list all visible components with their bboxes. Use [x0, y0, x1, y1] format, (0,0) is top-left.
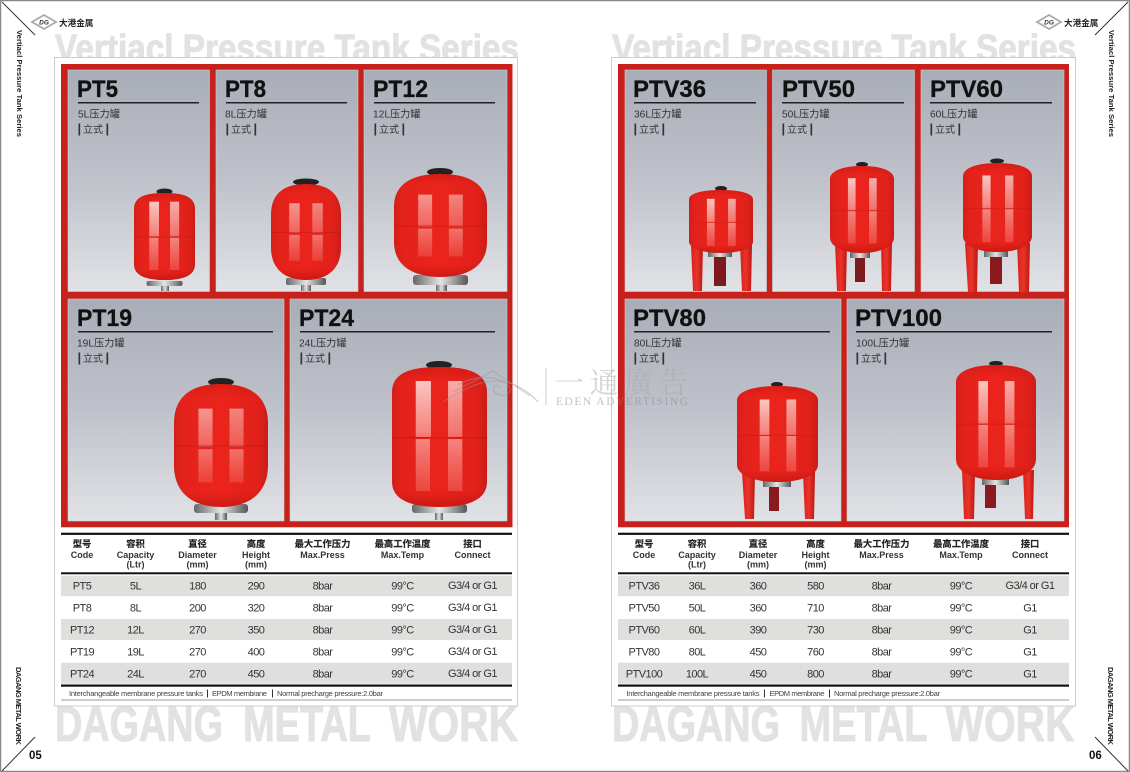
panel: PTV80: 立式: [639, 352, 659, 365]
panel: PT19: |: [106, 350, 109, 365]
row PTV80: 8bar: [872, 646, 892, 658]
panel: PT24: [290, 299, 507, 521]
row PTV80: PTV80: [629, 646, 660, 658]
panel: PT5: [68, 70, 210, 292]
watermark Chinese text: 一通廣告: [555, 361, 688, 402]
panel: PT5: |: [106, 121, 109, 136]
table header right: 直径: [749, 538, 767, 549]
footnote left: EPDM membrane: [212, 689, 267, 698]
side label top right: Vertiacl Pressure Tank Series: [1107, 30, 1116, 137]
row PTV36: 360: [750, 580, 767, 592]
table header left: Max.Press: [300, 550, 345, 560]
PT19 tank: [174, 378, 268, 520]
row PT5: G3/4 or G1: [448, 580, 497, 592]
row PT5: 8bar: [313, 580, 333, 592]
watermark title right: Vertiacl Pressure Tank Series: [612, 28, 1076, 70]
panel: PT19: [68, 299, 284, 521]
watermark footer left: WORK: [389, 696, 518, 752]
red frame left: [61, 64, 512, 527]
row PT19: 400: [248, 646, 265, 658]
PTV36 tank: [689, 186, 753, 291]
PTV100 tank: [956, 361, 1036, 519]
row PT24: 270: [189, 668, 206, 680]
row PTV50: 8bar: [872, 602, 892, 614]
watermark title left: Vertiacl Pressure Tank Series: [55, 28, 519, 70]
row PT5: 5L: [130, 580, 141, 592]
row PTV100: G1: [1023, 668, 1037, 680]
panel: PTV60: 60L压力罐: [930, 108, 978, 120]
panel: PT19: |: [78, 350, 81, 365]
footnote right: EPDM membrane: [770, 689, 824, 698]
red frame right: [618, 64, 1069, 527]
table header left: Connect: [454, 550, 491, 560]
PT24 heading: PT24: [299, 305, 355, 332]
PT8 tank: [271, 178, 341, 291]
row PT19: [70, 646, 497, 658]
panel: PTV60: [921, 70, 1064, 292]
logo right: [1037, 15, 1098, 29]
row PTV50: [629, 602, 1037, 614]
panel: PT24: |: [300, 350, 303, 365]
row PTV100: 450: [750, 668, 767, 680]
panel: PTV80: 80L压力罐: [634, 336, 682, 350]
panel: PTV100: 100L压力罐: [856, 336, 909, 350]
row PT12: 270: [189, 624, 206, 636]
panel: PTV60: |: [930, 121, 933, 136]
table left: [61, 533, 512, 700]
panel: PT24: 立式: [305, 352, 325, 365]
row PT8: 200: [189, 602, 206, 614]
row PTV100: 100L: [686, 668, 709, 680]
table header right: Height: [802, 550, 830, 560]
row PT19: 99°C: [391, 646, 414, 658]
PT19 heading: PT19: [77, 305, 132, 332]
row PT24: 99°C: [391, 668, 414, 680]
table header right: 容积: [688, 538, 707, 549]
PT12 heading: PT12: [373, 76, 428, 103]
row PTV100: PTV100: [626, 668, 663, 680]
row PTV80: [629, 646, 1037, 658]
panel: PTV60: |: [958, 121, 961, 136]
panel: PT8: |: [254, 121, 257, 136]
table header right: 最大工作压力: [854, 538, 909, 549]
footnote left: Interchangeable membrane pressure tanks: [69, 689, 203, 698]
panel: PT24: 24L压力罐: [299, 336, 347, 350]
table header right: (Ltr): [688, 560, 706, 570]
row PTV36: 36L: [689, 580, 706, 592]
panel: PT8: 8L压力罐: [225, 108, 267, 120]
table header left: 接口: [463, 538, 482, 549]
panel: PTV36: |: [662, 121, 665, 136]
table header left: Max.Temp: [381, 550, 425, 560]
footnote right: [626, 689, 940, 698]
panel: PTV36: 36L压力罐: [634, 108, 682, 120]
PT24 tank: [392, 361, 487, 520]
side label top left: Vertiacl Pressure Tank Series: [15, 30, 24, 137]
row PTV36: [618, 576, 1069, 596]
row PTV60: 730: [807, 624, 824, 636]
logo left: DG: [39, 20, 49, 26]
row PT12: 8bar: [313, 624, 333, 636]
row PT12: 99°C: [391, 624, 414, 636]
row PTV60: 60L: [689, 624, 706, 636]
panel: PTV36: [625, 70, 766, 292]
table header left: Capacity: [117, 550, 154, 560]
row PT19: PT19: [70, 646, 94, 658]
row PTV60: 8bar: [872, 624, 892, 636]
watermark footer right: METAL: [800, 696, 928, 752]
table header left: Height: [242, 550, 270, 560]
row PTV50: 360: [750, 602, 767, 614]
panel: PTV80: |: [634, 350, 637, 365]
row PTV36: 580: [807, 580, 824, 592]
row PTV60: 99°C: [950, 624, 973, 636]
row PTV50: 710: [807, 602, 824, 614]
panel: PTV60: 立式: [935, 123, 955, 136]
row PTV50: 50L: [689, 602, 706, 614]
footnote right: Normal precharge pressure:2.0bar: [834, 689, 940, 698]
PTV60 heading: PTV60: [930, 76, 1003, 103]
row PT12: 12L: [127, 624, 144, 636]
row PTV36: 8bar: [872, 580, 892, 592]
watermark footer right: WORK: [946, 696, 1074, 752]
table header right: (mm): [804, 560, 827, 570]
panel: PT5: |: [78, 121, 81, 136]
row PT8: [73, 602, 497, 614]
row PTV80: G1: [1023, 646, 1037, 658]
logo right: DG: [1044, 20, 1054, 26]
panel: PTV50: |: [810, 121, 813, 136]
table header right: Max.Temp: [939, 550, 983, 560]
row PTV60: PTV60: [629, 624, 660, 636]
table header left: [71, 538, 491, 570]
row PT24: 450: [248, 668, 265, 680]
row PTV100: [618, 663, 1069, 684]
page number 05: 05: [29, 750, 42, 762]
watermark English text: EDEN ADVERTISING: [556, 396, 688, 408]
table right: [618, 533, 1069, 700]
panel: PT12: 立式: [379, 123, 399, 136]
row PT5: 99°C: [391, 580, 414, 592]
row PTV60: 390: [750, 624, 767, 636]
page 06: [612, 15, 1116, 762]
watermark footer right: DAGANG: [612, 696, 780, 752]
row PT24: 8bar: [313, 668, 333, 680]
panel: PTV100: 立式: [861, 352, 881, 365]
panel: PT12: |: [402, 121, 405, 136]
footnote left: Normal precharge pressure:2.0bar: [277, 689, 383, 698]
panel: PT12: 12L压力罐: [373, 108, 421, 120]
row PTV36: G3/4 or G1: [1006, 580, 1055, 592]
table header right: Connect: [1012, 550, 1048, 560]
table header right: Diameter: [739, 550, 778, 560]
row PTV80: 80L: [689, 646, 706, 658]
row PT24: [61, 663, 512, 684]
table header left: (Ltr): [126, 560, 144, 570]
row PT8: PT8: [73, 602, 92, 614]
row PTV50: G1: [1023, 602, 1037, 614]
watermark footer left: [55, 696, 518, 752]
table header left: 最高工作温度: [375, 538, 431, 549]
row PTV60: G1: [1023, 624, 1037, 636]
table header right: 高度: [806, 538, 825, 549]
card left: [54, 58, 518, 706]
table header left: 直径: [188, 538, 207, 549]
row PTV100: 99°C: [950, 668, 973, 680]
row PT5: [61, 576, 512, 596]
row PTV36: PTV36: [629, 580, 660, 592]
watermark footer left: DAGANG: [55, 696, 223, 752]
table header left: Diameter: [178, 550, 217, 560]
row PT5: 290: [248, 580, 265, 592]
watermark icon: [443, 371, 538, 402]
panel: PT19: 19L压力罐: [77, 336, 125, 350]
table header left: 最大工作压力: [295, 538, 350, 549]
PTV50 heading: PTV50: [782, 76, 855, 103]
row PT12: G3/4 or G1: [448, 624, 497, 636]
panel: PTV80: [625, 299, 841, 521]
PTV60 tank: [963, 158, 1032, 292]
row PTV50: 99°C: [950, 602, 973, 614]
panel: PTV50: 立式: [787, 123, 807, 136]
row PTV36: 99°C: [950, 580, 973, 592]
panel: PTV50: |: [782, 121, 785, 136]
panel: PT12: [364, 70, 507, 292]
row PT8: 8bar: [313, 602, 333, 614]
panel: PTV80: |: [662, 350, 665, 365]
table header right: Capacity: [678, 550, 716, 560]
panel: PT12: |: [374, 121, 377, 136]
table header right: [633, 538, 1048, 570]
row PT8: 99°C: [391, 602, 414, 614]
row PTV50: PTV50: [629, 602, 660, 614]
table header right: Max.Press: [859, 550, 904, 560]
PTV80 tank: [737, 382, 818, 519]
table header right: (mm): [747, 560, 769, 570]
row PT8: 8L: [130, 602, 141, 614]
row PTV80: 450: [750, 646, 767, 658]
panel: PTV100: |: [856, 350, 859, 365]
PTV50 tank: [830, 162, 894, 291]
row PT5: PT5: [73, 580, 92, 592]
table header left: 型号: [73, 538, 91, 549]
row PT24: 24L: [127, 668, 144, 680]
panel: PT5: 立式: [83, 123, 103, 136]
row PT5: 180: [189, 580, 206, 592]
footnote right: Interchangeable membrane pressure tanks: [626, 689, 760, 698]
side label bottom left: DAGANG METAL WORK: [14, 667, 23, 746]
PT12 tank: [394, 168, 487, 291]
card right: [612, 58, 1076, 706]
row PTV80: 99°C: [950, 646, 973, 658]
watermark: Eden Advertising: [443, 361, 688, 408]
row PT19: 19L: [127, 646, 144, 658]
panel: PTV100: [847, 299, 1064, 521]
row PTV100: 800: [807, 668, 824, 680]
panel: PT24: |: [328, 350, 331, 365]
PTV36 heading: PTV36: [633, 76, 706, 103]
panel: PT8: |: [226, 121, 229, 136]
row PTV80: 760: [807, 646, 824, 658]
panel: PTV50: 50L压力罐: [782, 108, 830, 120]
row PT19: G3/4 or G1: [448, 646, 497, 658]
panel: PT8: 立式: [231, 123, 251, 136]
row PT12: PT12: [70, 624, 94, 636]
footnote left: [69, 689, 383, 698]
row PTV100: 8bar: [872, 668, 892, 680]
PT5 tank: [134, 188, 195, 291]
panel: PTV100: |: [884, 350, 887, 365]
table header left: Code: [71, 550, 93, 560]
row PT19: 8bar: [313, 646, 333, 658]
table header right: 最高工作温度: [933, 538, 990, 549]
row PT12: 350: [248, 624, 265, 636]
PT5 heading: PT5: [77, 76, 118, 103]
row PTV60: [618, 619, 1069, 640]
panel: PT8: [216, 70, 358, 292]
panel: PT5: 5L压力罐: [78, 108, 120, 120]
PTV80 heading: PTV80: [633, 305, 706, 332]
row PT19: 270: [189, 646, 206, 658]
table header left: (mm): [245, 560, 267, 570]
row PT8: G3/4 or G1: [448, 602, 497, 614]
PT8 heading: PT8: [225, 76, 266, 103]
logo right: 大港金属: [1064, 17, 1098, 28]
panel: PT19: 立式: [83, 352, 103, 365]
row PT24: G3/4 or G1: [448, 668, 497, 680]
panel: PTV50: [772, 70, 914, 292]
row PT12: [61, 619, 512, 640]
table header left: 高度: [247, 538, 266, 549]
logo left: [32, 15, 93, 29]
row PT8: 320: [248, 602, 265, 614]
logo left: 大港金属: [59, 17, 93, 28]
watermark footer left: METAL: [243, 696, 371, 752]
table header right: Code: [633, 550, 655, 560]
table header right: 型号: [635, 538, 653, 549]
PTV100 heading: PTV100: [855, 305, 942, 332]
table header left: (mm): [186, 560, 209, 570]
table header left: 容积: [126, 538, 145, 549]
panel: PTV36: |: [634, 121, 637, 136]
watermark footer right: [612, 696, 1074, 752]
page 05: [14, 15, 519, 762]
row PT24: PT24: [70, 668, 94, 680]
table header right: 接口: [1021, 538, 1039, 549]
side label bottom right: DAGANG METAL WORK: [1106, 667, 1115, 746]
panel: PTV36: 立式: [639, 123, 659, 136]
page number 06: 06: [1089, 750, 1102, 762]
